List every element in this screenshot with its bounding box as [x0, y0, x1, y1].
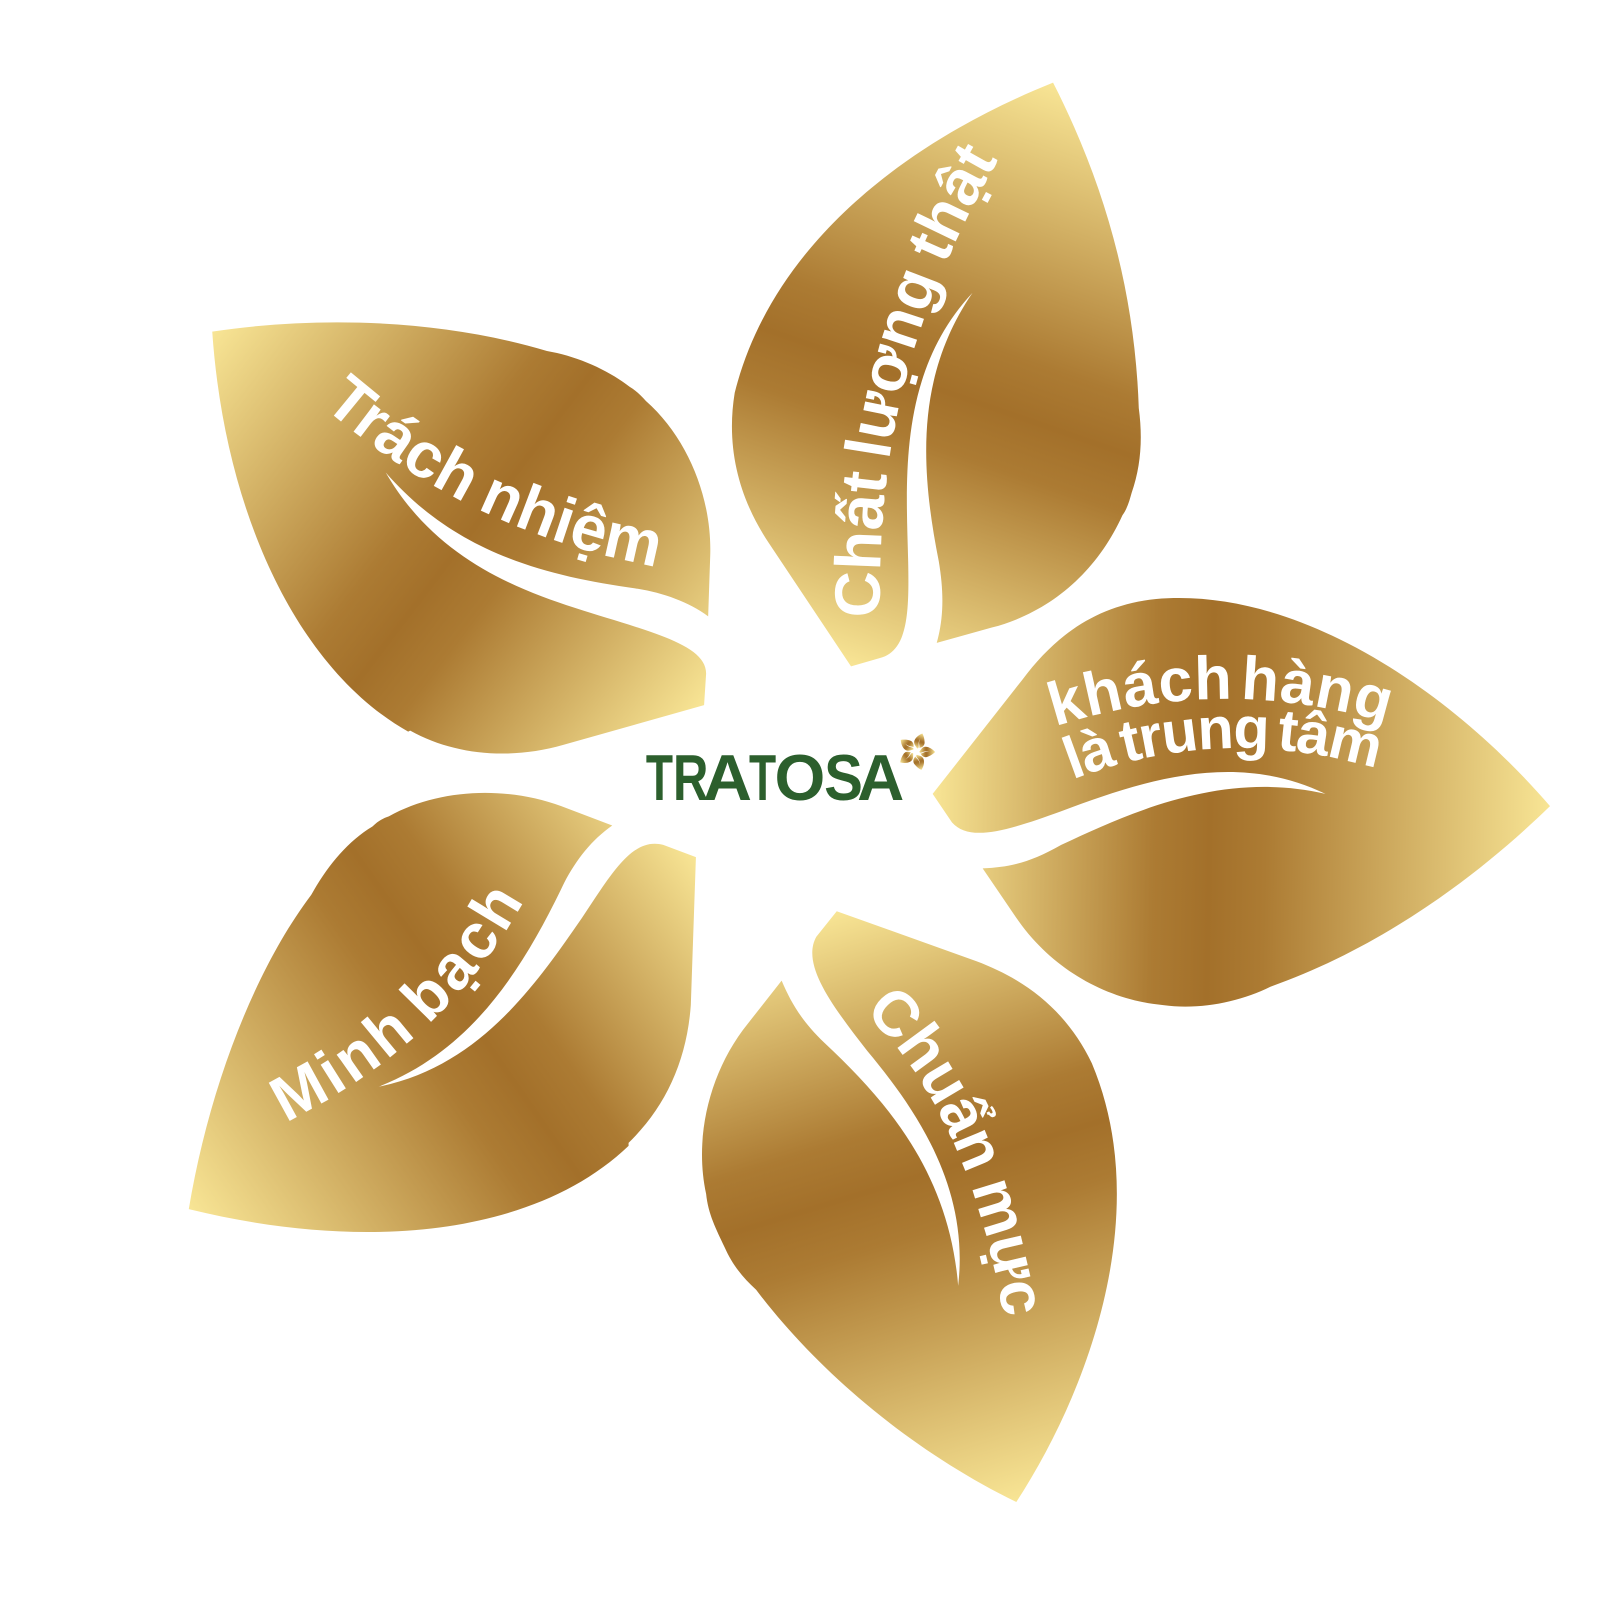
leaf: Chất lượng thật	[732, 82, 1141, 666]
label: Chất lượng thật: Chất lượng thật	[834, 144, 998, 615]
label: là trung tâm: là trung tâm	[1062, 710, 1379, 778]
leaf shape: lower left	[189, 793, 696, 1232]
logo wordmark	[646, 740, 904, 815]
leaf shape: right	[933, 598, 1550, 1007]
label: Minh bạch: Minh bạch	[268, 890, 522, 1121]
logo wordmark: A	[857, 741, 904, 814]
leaf: Khách hàng là trung tâm	[932, 598, 1550, 1007]
leaf shape: top	[732, 83, 1141, 666]
logo wordmark: R	[673, 742, 708, 815]
leaf shape: bottom	[702, 911, 1117, 1502]
icon: small gold flower	[900, 733, 935, 770]
logo wordmark: O	[774, 741, 825, 814]
label: Chuẩn mực: Chuẩn mực	[873, 991, 1035, 1314]
leaf: Chuẩn mực	[702, 911, 1117, 1502]
logo wordmark: A	[703, 742, 752, 815]
logo wordmark: S	[824, 742, 863, 815]
logo: TRATOSA	[646, 733, 935, 815]
label: Khách hàng: khách hàng	[1046, 654, 1391, 732]
leaf: Trách nhiệm	[212, 322, 710, 754]
leaf shape: upper left	[212, 322, 710, 754]
logo wordmark: T	[646, 740, 673, 814]
label: Trách nhiệm: Trách nhiệm	[334, 372, 658, 566]
leaf: Minh bạch	[188, 792, 696, 1232]
logo wordmark: T	[749, 740, 776, 814]
